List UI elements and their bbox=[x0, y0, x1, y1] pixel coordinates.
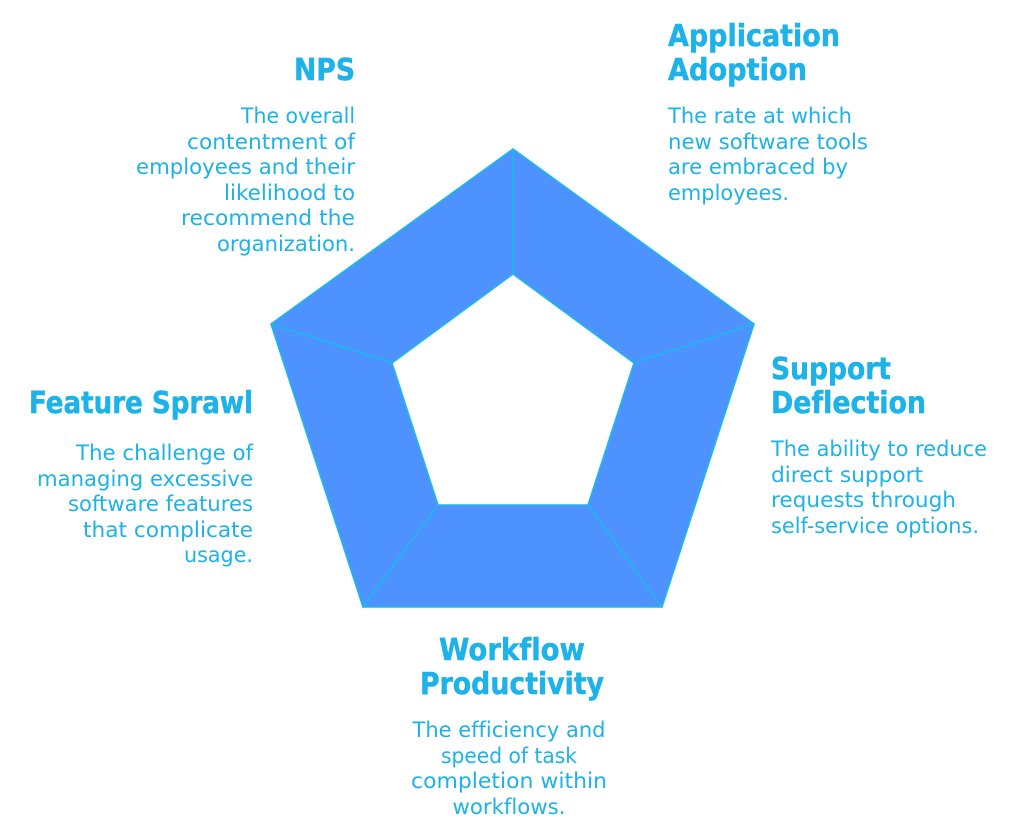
description: Support Deflection: requests through bbox=[771, 488, 956, 513]
description: Feature Sprawl: managing excessive bbox=[37, 467, 253, 492]
heading: Workflow Productivity: Workflow bbox=[439, 633, 585, 668]
text block: Support Deflection bbox=[770, 352, 987, 539]
description: Feature Sprawl bbox=[37, 441, 253, 568]
segment: Workflow Productivity bbox=[363, 505, 662, 607]
description: Feature Sprawl: usage. bbox=[184, 543, 253, 568]
heading: Support Deflection: Support bbox=[771, 352, 891, 387]
description: Workflow Productivity: completion within bbox=[411, 769, 607, 794]
segment: Application Adoption bbox=[513, 149, 754, 363]
heading: Application Adoption bbox=[668, 19, 840, 88]
description: NPS: The overall bbox=[240, 104, 355, 129]
heading: Workflow Productivity bbox=[420, 633, 604, 702]
description: Feature Sprawl: that complicate bbox=[83, 518, 253, 543]
description: Support Deflection: self-service options. bbox=[771, 514, 979, 539]
description: Application Adoption: are embraced by bbox=[668, 155, 848, 180]
text block: Application Adoption bbox=[667, 19, 868, 206]
description: Workflow Productivity: The efficiency and bbox=[412, 718, 606, 743]
description: Feature Sprawl: The challenge of bbox=[75, 441, 253, 466]
description: Support Deflection: The ability to reduce bbox=[770, 437, 987, 462]
segment: NPS bbox=[271, 149, 513, 363]
segment: Support Deflection bbox=[588, 324, 754, 607]
description: NPS: likelihood to bbox=[224, 181, 355, 206]
heading: NPS: NPS bbox=[294, 53, 355, 88]
text block: Feature Sprawl bbox=[29, 386, 253, 568]
description: Workflow Productivity: speed of task bbox=[441, 744, 578, 769]
text block: NPS bbox=[136, 53, 355, 257]
description: Application Adoption: new software tools bbox=[668, 130, 868, 155]
description: Application Adoption bbox=[667, 104, 868, 206]
description: Application Adoption: employees. bbox=[668, 181, 789, 206]
description: NPS: employees and their bbox=[136, 155, 355, 180]
description: Application Adoption: The rate at which bbox=[667, 104, 852, 129]
heading: Application Adoption: Adoption bbox=[668, 53, 807, 88]
segment: Feature Sprawl bbox=[271, 324, 438, 607]
heading: Workflow Productivity: Productivity bbox=[420, 667, 604, 702]
description: Feature Sprawl: software features bbox=[68, 492, 253, 517]
description: Support Deflection bbox=[770, 437, 987, 539]
heading: Feature Sprawl: Feature Sprawl bbox=[29, 386, 253, 421]
heading: Support Deflection bbox=[771, 352, 926, 421]
pentagon diagram bbox=[271, 149, 754, 607]
heading: Application Adoption: Application bbox=[668, 19, 840, 54]
text block: Workflow Productivity bbox=[411, 633, 607, 820]
description: NPS bbox=[136, 104, 355, 257]
description: NPS: contentment of bbox=[187, 130, 355, 155]
heading: Support Deflection: Deflection bbox=[771, 386, 926, 421]
description: Support Deflection: direct support bbox=[771, 463, 923, 488]
description: NPS: organization. bbox=[217, 232, 355, 257]
description: Workflow Productivity: workflows. bbox=[452, 795, 566, 820]
description: NPS: recommend the bbox=[181, 206, 355, 231]
description: Workflow Productivity bbox=[411, 718, 607, 820]
